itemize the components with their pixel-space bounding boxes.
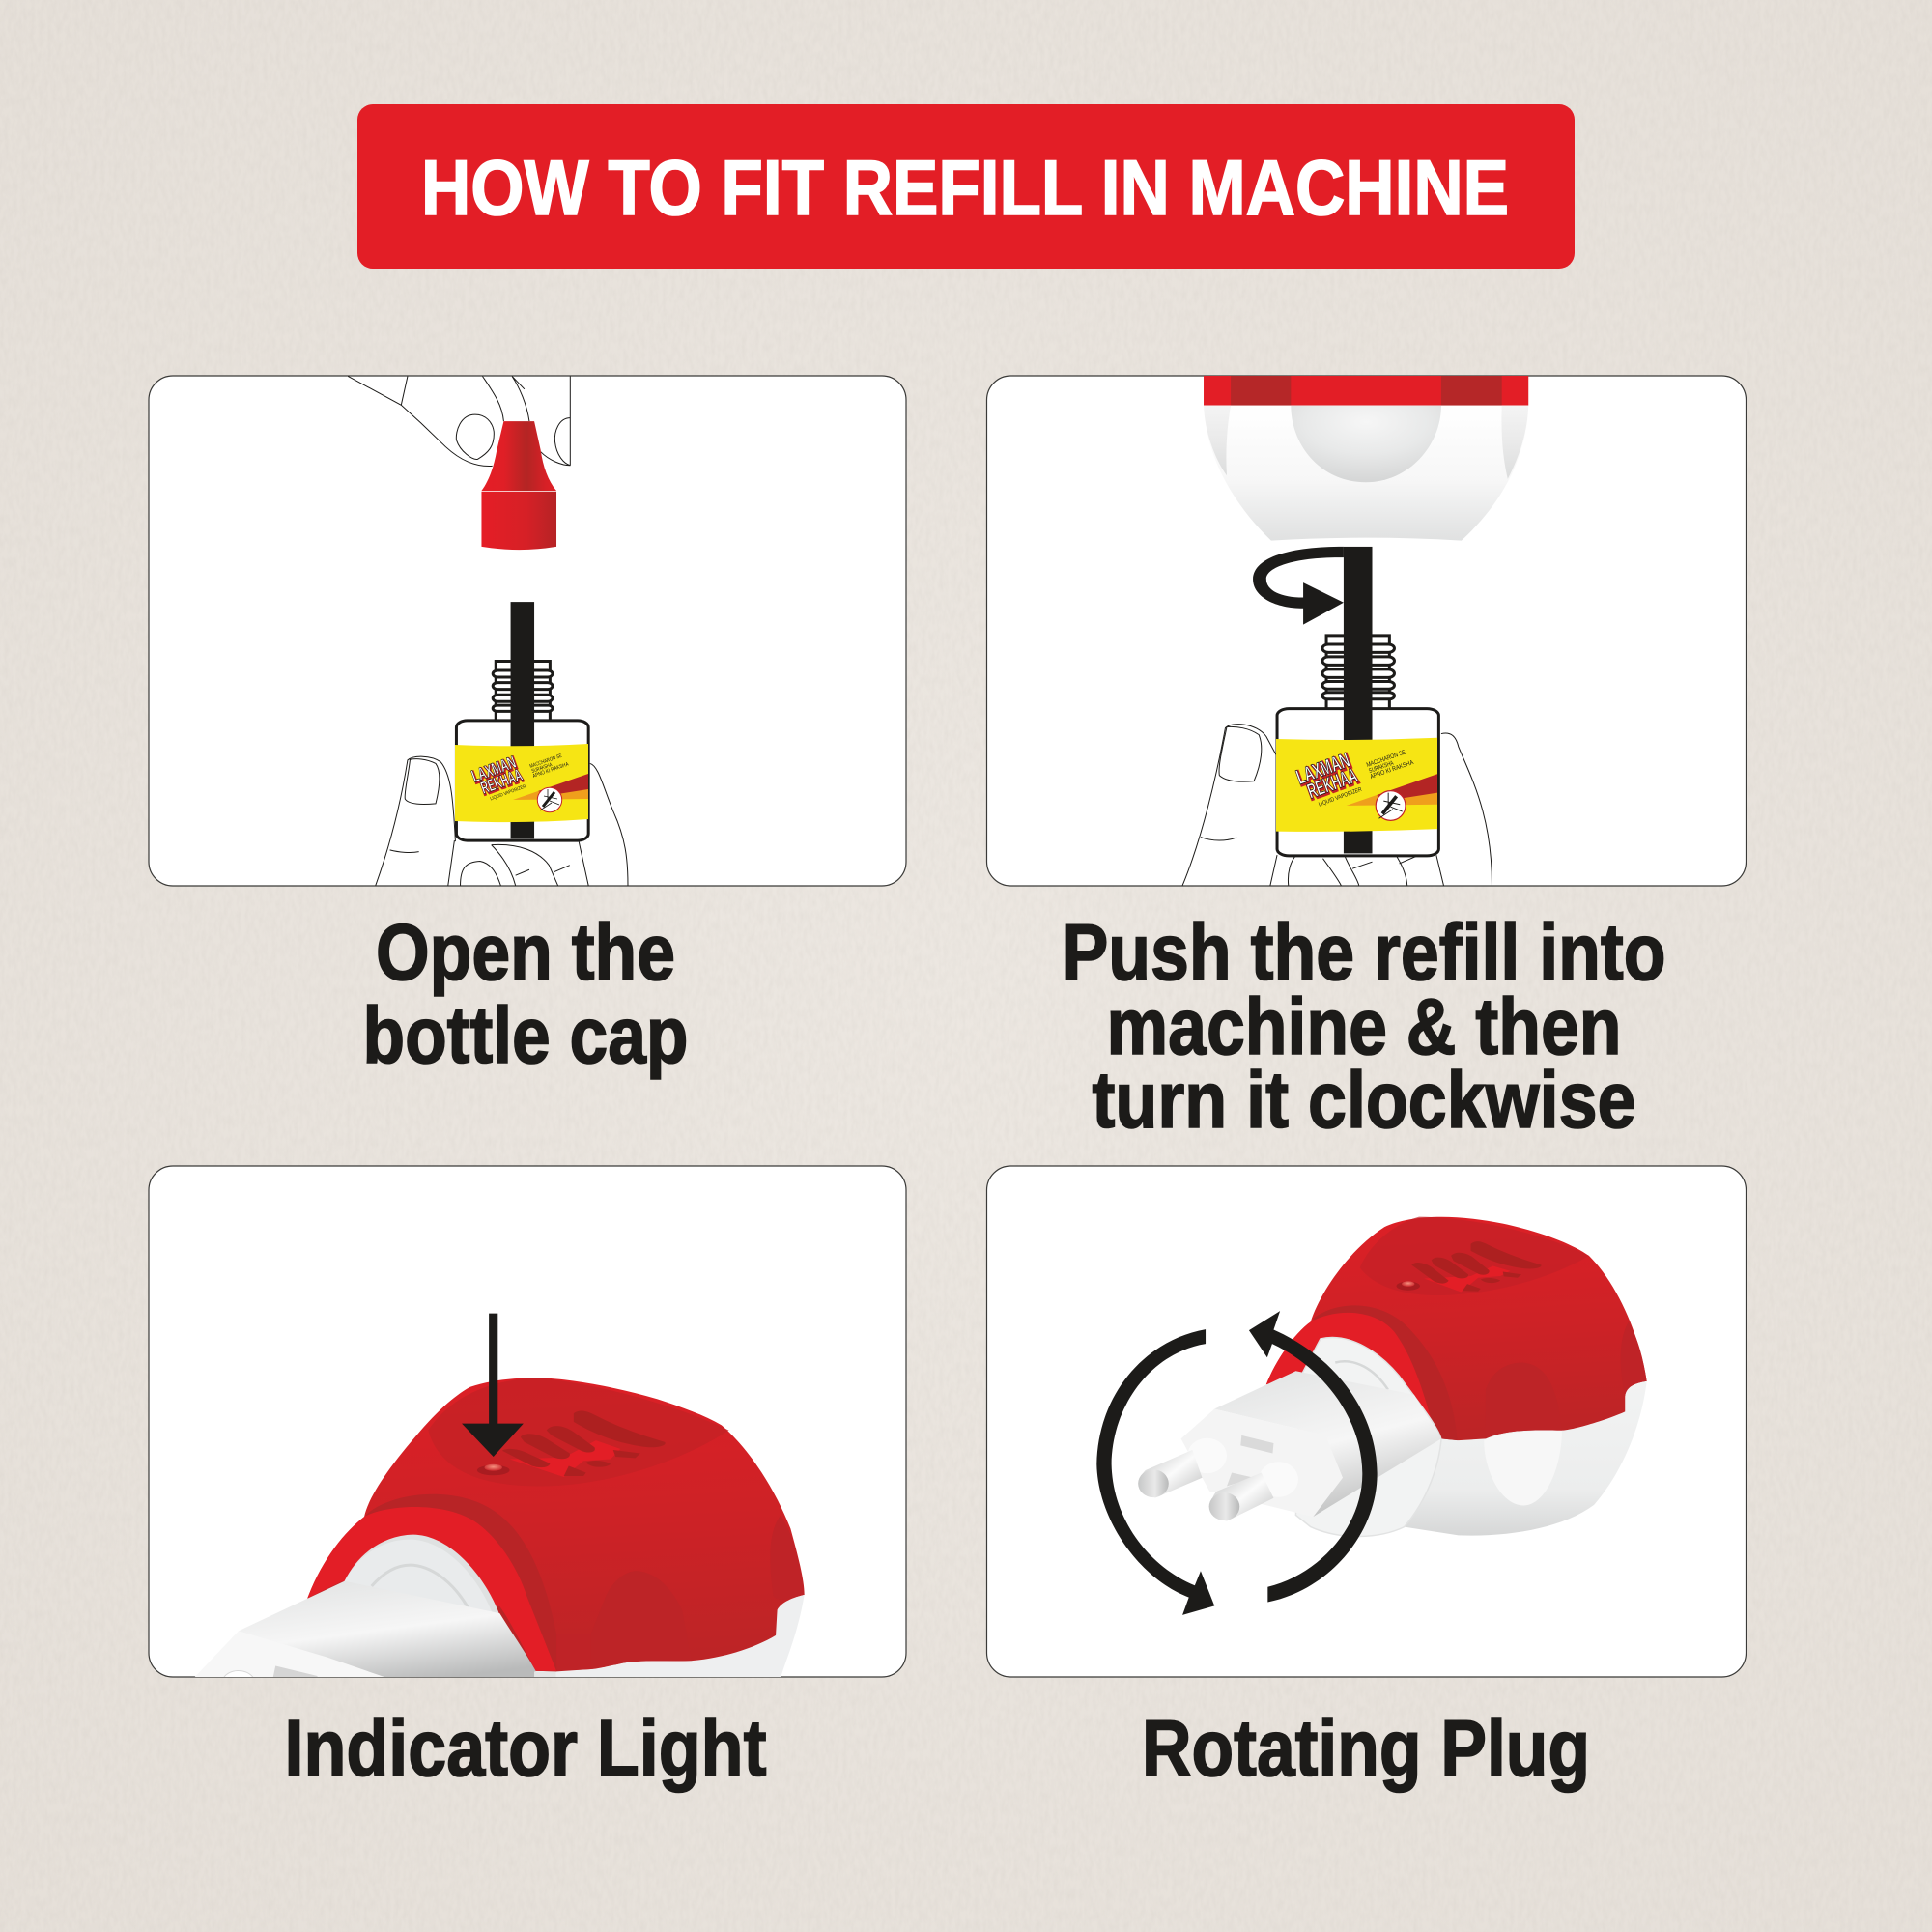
panel: open the bottle cap xyxy=(149,376,906,886)
bottle label, panel 2: REKHAA xyxy=(1304,763,1361,803)
bottle label, panel 2: APNO KI RAKSHA xyxy=(1369,759,1415,781)
bottom hand xyxy=(1182,724,1492,886)
vents on machine top xyxy=(502,1410,666,1477)
bottle label, panel 2: LAXMAN xyxy=(1293,748,1352,789)
caption: indicator light: Indicator Light xyxy=(284,1703,767,1793)
panel: indicator light xyxy=(149,1166,906,1678)
rotation arrows xyxy=(1096,1311,1378,1615)
bottle label, panel 2: LAXMAN xyxy=(1294,749,1354,790)
clockwise arrow xyxy=(1253,547,1344,625)
bottle label, panel 2: MACCHARON SE xyxy=(1366,749,1406,769)
refill bottle xyxy=(456,602,588,840)
bottle label, panel 1: APNO KI RAKSHA xyxy=(532,761,570,780)
title banner xyxy=(357,104,1575,269)
rotating plug and base xyxy=(194,1535,556,1678)
caption: push the refill: machine & then xyxy=(1107,981,1621,1071)
indicator LED xyxy=(1397,1281,1420,1291)
caption: open the bottle cap xyxy=(363,907,688,1080)
bottle label, panel 1: LAXMAN xyxy=(469,753,519,786)
bottle label, panel 1: LAXMAN xyxy=(470,753,520,787)
panel: push the refill xyxy=(987,376,1747,886)
caption: push the refill: Push the refill into xyxy=(1063,907,1665,997)
bottle label, panel 1: REKHAA xyxy=(479,766,526,799)
caption: push the refill: turn it clockwise xyxy=(1092,1055,1636,1145)
machine seen from below xyxy=(1204,376,1528,541)
caption: rotating plug: Rotating Plug xyxy=(1142,1703,1590,1793)
bottle label, panel 1: SURAKSHA xyxy=(531,762,554,775)
machine close-up xyxy=(307,1378,805,1678)
bottle label, panel 1: MACCHARON SE xyxy=(529,753,563,770)
panel: rotating plug xyxy=(987,1166,1747,1677)
bottle label, panel 2 xyxy=(1276,738,1437,832)
arrow pointing at indicator light xyxy=(462,1314,524,1457)
caption: open the bottle cap: Open the xyxy=(376,907,675,997)
rotating base ring xyxy=(1295,1338,1441,1536)
bottle label, panel 1: REKHAA xyxy=(478,765,525,798)
title banner: HOW TO FIT REFILL IN MACHINE xyxy=(421,145,1509,232)
indicator LED xyxy=(477,1464,510,1475)
refill bottle xyxy=(1277,547,1438,856)
bottle label, panel 1: LIQUID VAPORIZER xyxy=(490,783,527,802)
bottle label, panel 2: LIQUID VAPORIZER xyxy=(1318,786,1363,808)
red bottle cap xyxy=(481,421,556,550)
caption: open the bottle cap: bottle cap xyxy=(363,990,688,1080)
bottle label, panel 2: REKHAA xyxy=(1304,764,1361,805)
caption: push the refill xyxy=(1063,907,1665,1145)
top hand holding cap xyxy=(348,376,570,467)
bottle label, panel 2: SURAKSHA xyxy=(1368,760,1395,775)
plug xyxy=(1138,1371,1441,1521)
bottle label, panel 1 xyxy=(455,744,588,822)
bottom hand xyxy=(376,756,628,886)
machine body xyxy=(1266,1217,1647,1536)
